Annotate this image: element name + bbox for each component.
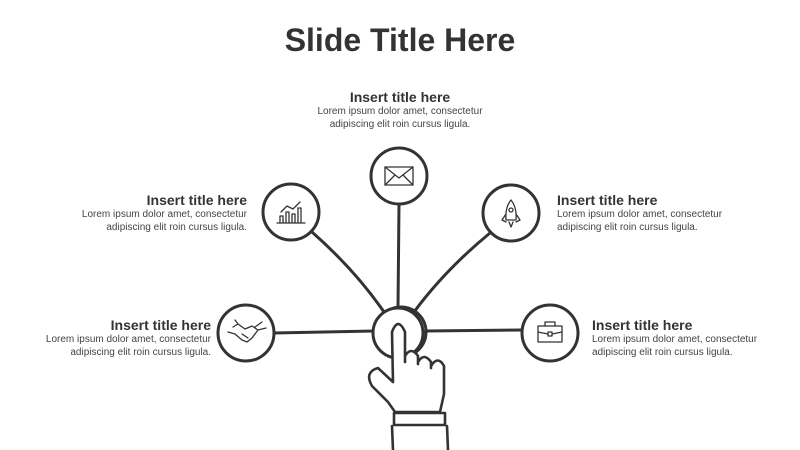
text: adipiscing elit roin cursus ligula. — [106, 222, 247, 232]
text: Lorem ipsum dolor amet, consectetur — [557, 209, 722, 220]
text: adipiscing elit roin cursus ligula. — [592, 346, 733, 358]
text: upper left: Insert title here — [147, 192, 247, 208]
circle: rocket — [483, 185, 539, 241]
text: adipiscing elit roin cursus ligula. — [557, 222, 698, 232]
text: Lorem ipsum dolor amet, consectetur — [46, 334, 211, 345]
circle: chart — [263, 184, 319, 240]
hand — [369, 324, 448, 450]
circle: briefcase — [522, 305, 578, 361]
text: Lorem ipsum dolor amet, consectetur — [82, 209, 247, 220]
center button — [373, 307, 426, 358]
circle: handshake — [218, 305, 274, 361]
text: top: Insert title here — [350, 89, 450, 105]
text: Lorem ipsum dolor amet, consectetur — [317, 106, 483, 117]
text: upper right: Insert title here — [557, 192, 657, 208]
title: Slide Title Here — [285, 22, 515, 58]
text: lower right: Insert title here — [592, 317, 692, 333]
text: lower left: Insert title here — [111, 317, 211, 333]
text: adipiscing elit roin cursus ligula. — [70, 346, 211, 358]
text: Lorem ipsum dolor amet, consectetur — [592, 334, 757, 345]
connectors — [274, 204, 522, 333]
text: adipiscing elit roin cursus ligula. — [330, 118, 470, 130]
circle: mail — [371, 148, 427, 204]
